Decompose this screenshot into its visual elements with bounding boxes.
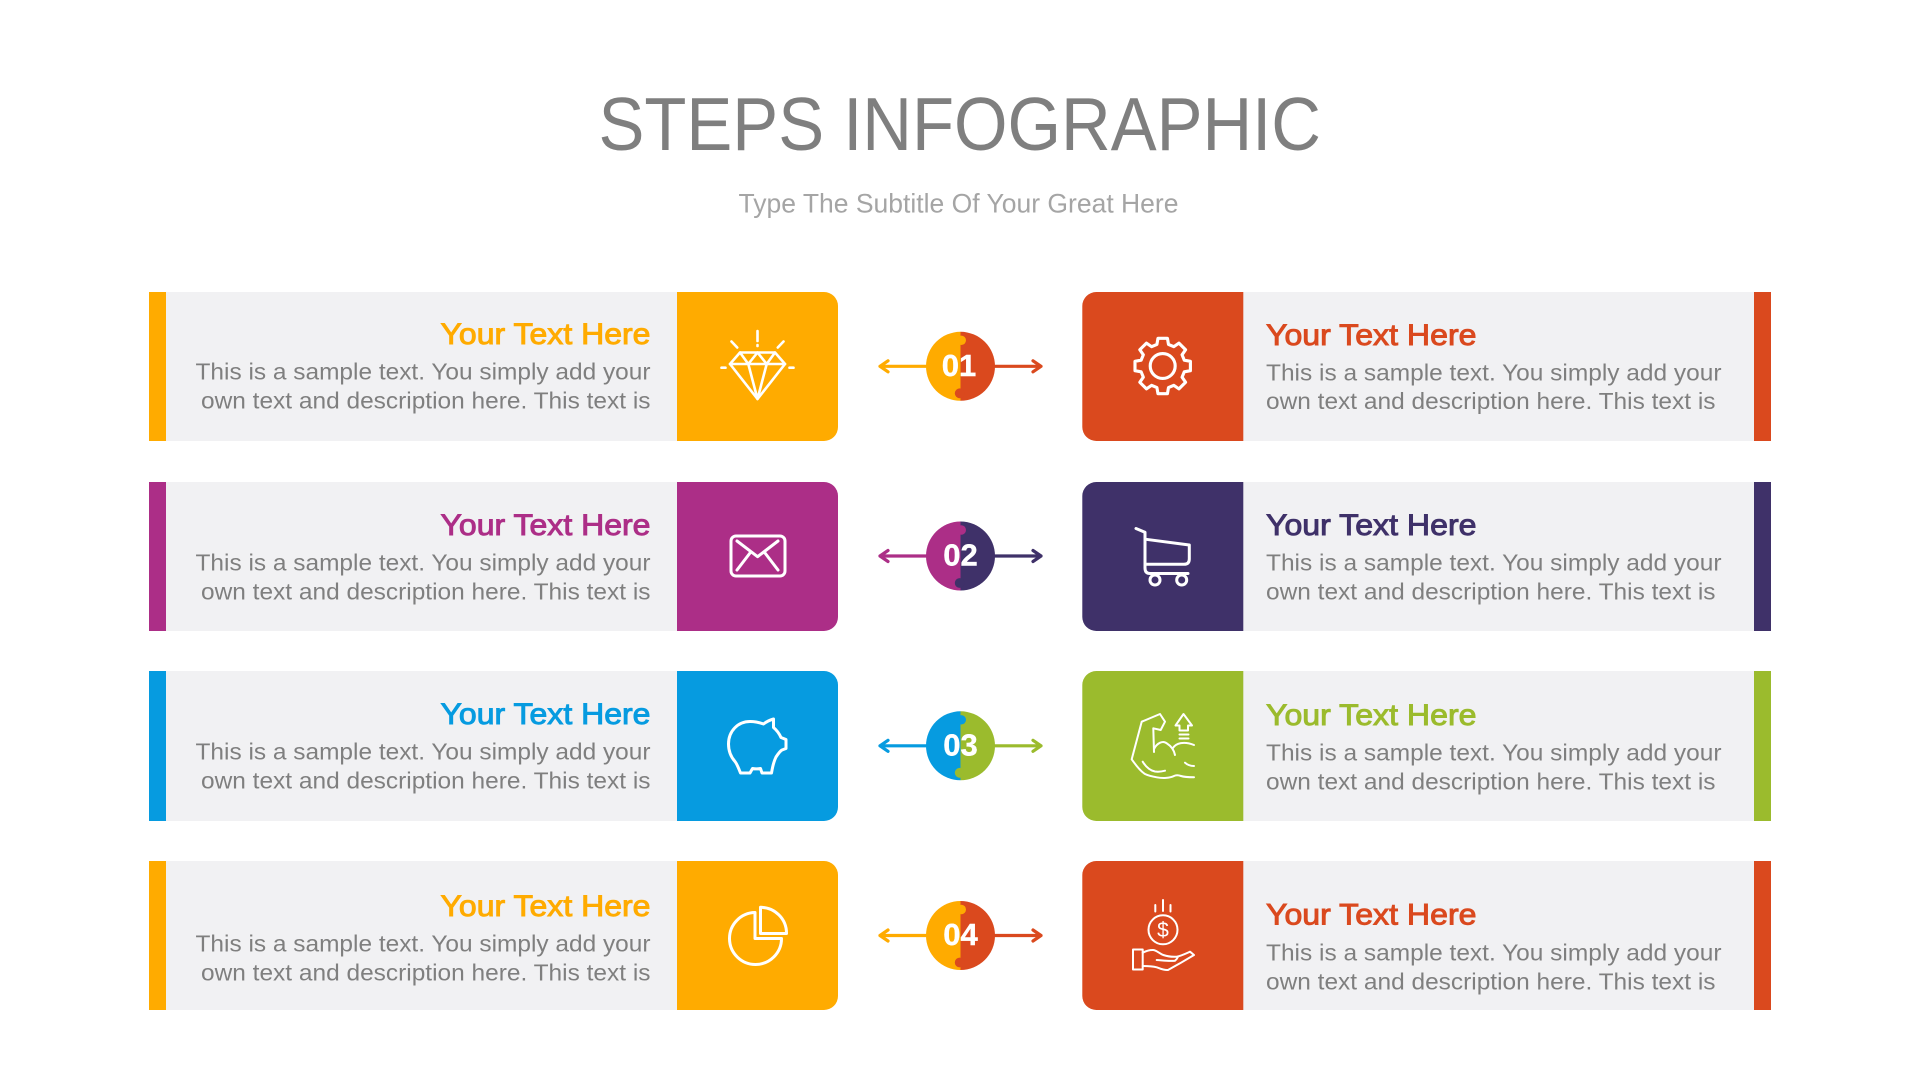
icon: hand holding coin xyxy=(1133,900,1194,970)
panel: step 01 right xyxy=(1082,292,1771,441)
body text xyxy=(1266,550,1722,604)
arrow left xyxy=(880,930,926,941)
heading: Your Text Here xyxy=(1266,898,1476,932)
body text: This is a sample text. You simply add your xyxy=(196,738,651,764)
heading: Your Text Here xyxy=(440,698,650,731)
subtitle: Type The Subtitle Of Your Great Here xyxy=(738,188,1178,218)
heading: Your Text Here xyxy=(440,890,650,923)
step number badge 02 with arrows xyxy=(880,522,1041,590)
body text xyxy=(196,550,651,604)
panel: step 03 left xyxy=(149,671,838,821)
arrow left xyxy=(880,550,926,562)
arrow right xyxy=(994,740,1041,751)
heading: Your Text Here xyxy=(1266,509,1476,542)
icon: flexed arm with up arrow xyxy=(1132,714,1194,778)
step number badge 04 with arrows xyxy=(880,901,1041,970)
body text xyxy=(1266,740,1722,794)
body text: This is a sample text. You simply add your xyxy=(1266,360,1722,386)
body text: This is a sample text. You simply add your xyxy=(196,358,651,384)
arrow right xyxy=(994,550,1041,562)
panel: step 04 right xyxy=(1082,861,1771,1010)
body text xyxy=(196,358,651,414)
heading: Your Text Here xyxy=(1266,319,1476,352)
body text: own text and description here. This text is xyxy=(201,768,650,794)
body text: own text and description here. This text is xyxy=(1266,388,1716,414)
arrow left xyxy=(880,740,926,751)
number: 01 xyxy=(942,348,976,383)
arrow right xyxy=(994,930,1041,941)
panel: step 01 left xyxy=(149,292,838,441)
panel: step 04 left xyxy=(149,861,838,1010)
heading: Your Text Here xyxy=(1266,699,1476,732)
step number badge 03 with arrows xyxy=(880,711,1041,780)
number: 02 xyxy=(943,538,978,572)
arrow right xyxy=(994,361,1041,372)
icon: diamond xyxy=(722,331,794,399)
icon: gear xyxy=(1135,338,1190,394)
panel: step 02 left xyxy=(149,482,838,631)
body text: own text and description here. This text is xyxy=(1266,578,1716,604)
body text xyxy=(196,930,651,986)
body text: This is a sample text. You simply add your xyxy=(196,930,651,956)
body text xyxy=(196,738,651,794)
icon: hand holding coin: $ xyxy=(1157,919,1169,942)
heading: Your Text Here xyxy=(440,318,650,351)
body text: own text and description here. This text is xyxy=(1266,768,1716,794)
icon: shopping cart xyxy=(1136,528,1189,585)
body text: This is a sample text. You simply add your xyxy=(1266,940,1722,966)
icon: envelope xyxy=(731,536,785,576)
body text xyxy=(1266,940,1722,994)
step number badge 01 with arrows xyxy=(880,332,1041,401)
icon: pie chart xyxy=(730,907,787,964)
body text: own text and description here. This text is xyxy=(201,960,650,986)
body text: own text and description here. This text is xyxy=(1266,968,1716,994)
body text: This is a sample text. You simply add your xyxy=(1266,550,1722,576)
number: 04 xyxy=(943,917,978,952)
body text: This is a sample text. You simply add your xyxy=(1266,740,1722,766)
number: 03 xyxy=(943,727,978,762)
panel: step 03 right xyxy=(1082,671,1771,821)
title: STEPS INFOGRAPHIC xyxy=(598,82,1321,166)
body text xyxy=(1266,360,1722,414)
body text: own text and description here. This text is xyxy=(201,578,650,604)
icon: piggy bank xyxy=(728,719,786,773)
body text: own text and description here. This text is xyxy=(201,388,650,414)
panel: step 02 right xyxy=(1082,482,1771,631)
body text: This is a sample text. You simply add your xyxy=(196,550,651,576)
heading: Your Text Here xyxy=(440,509,650,542)
arrow left xyxy=(880,361,926,372)
